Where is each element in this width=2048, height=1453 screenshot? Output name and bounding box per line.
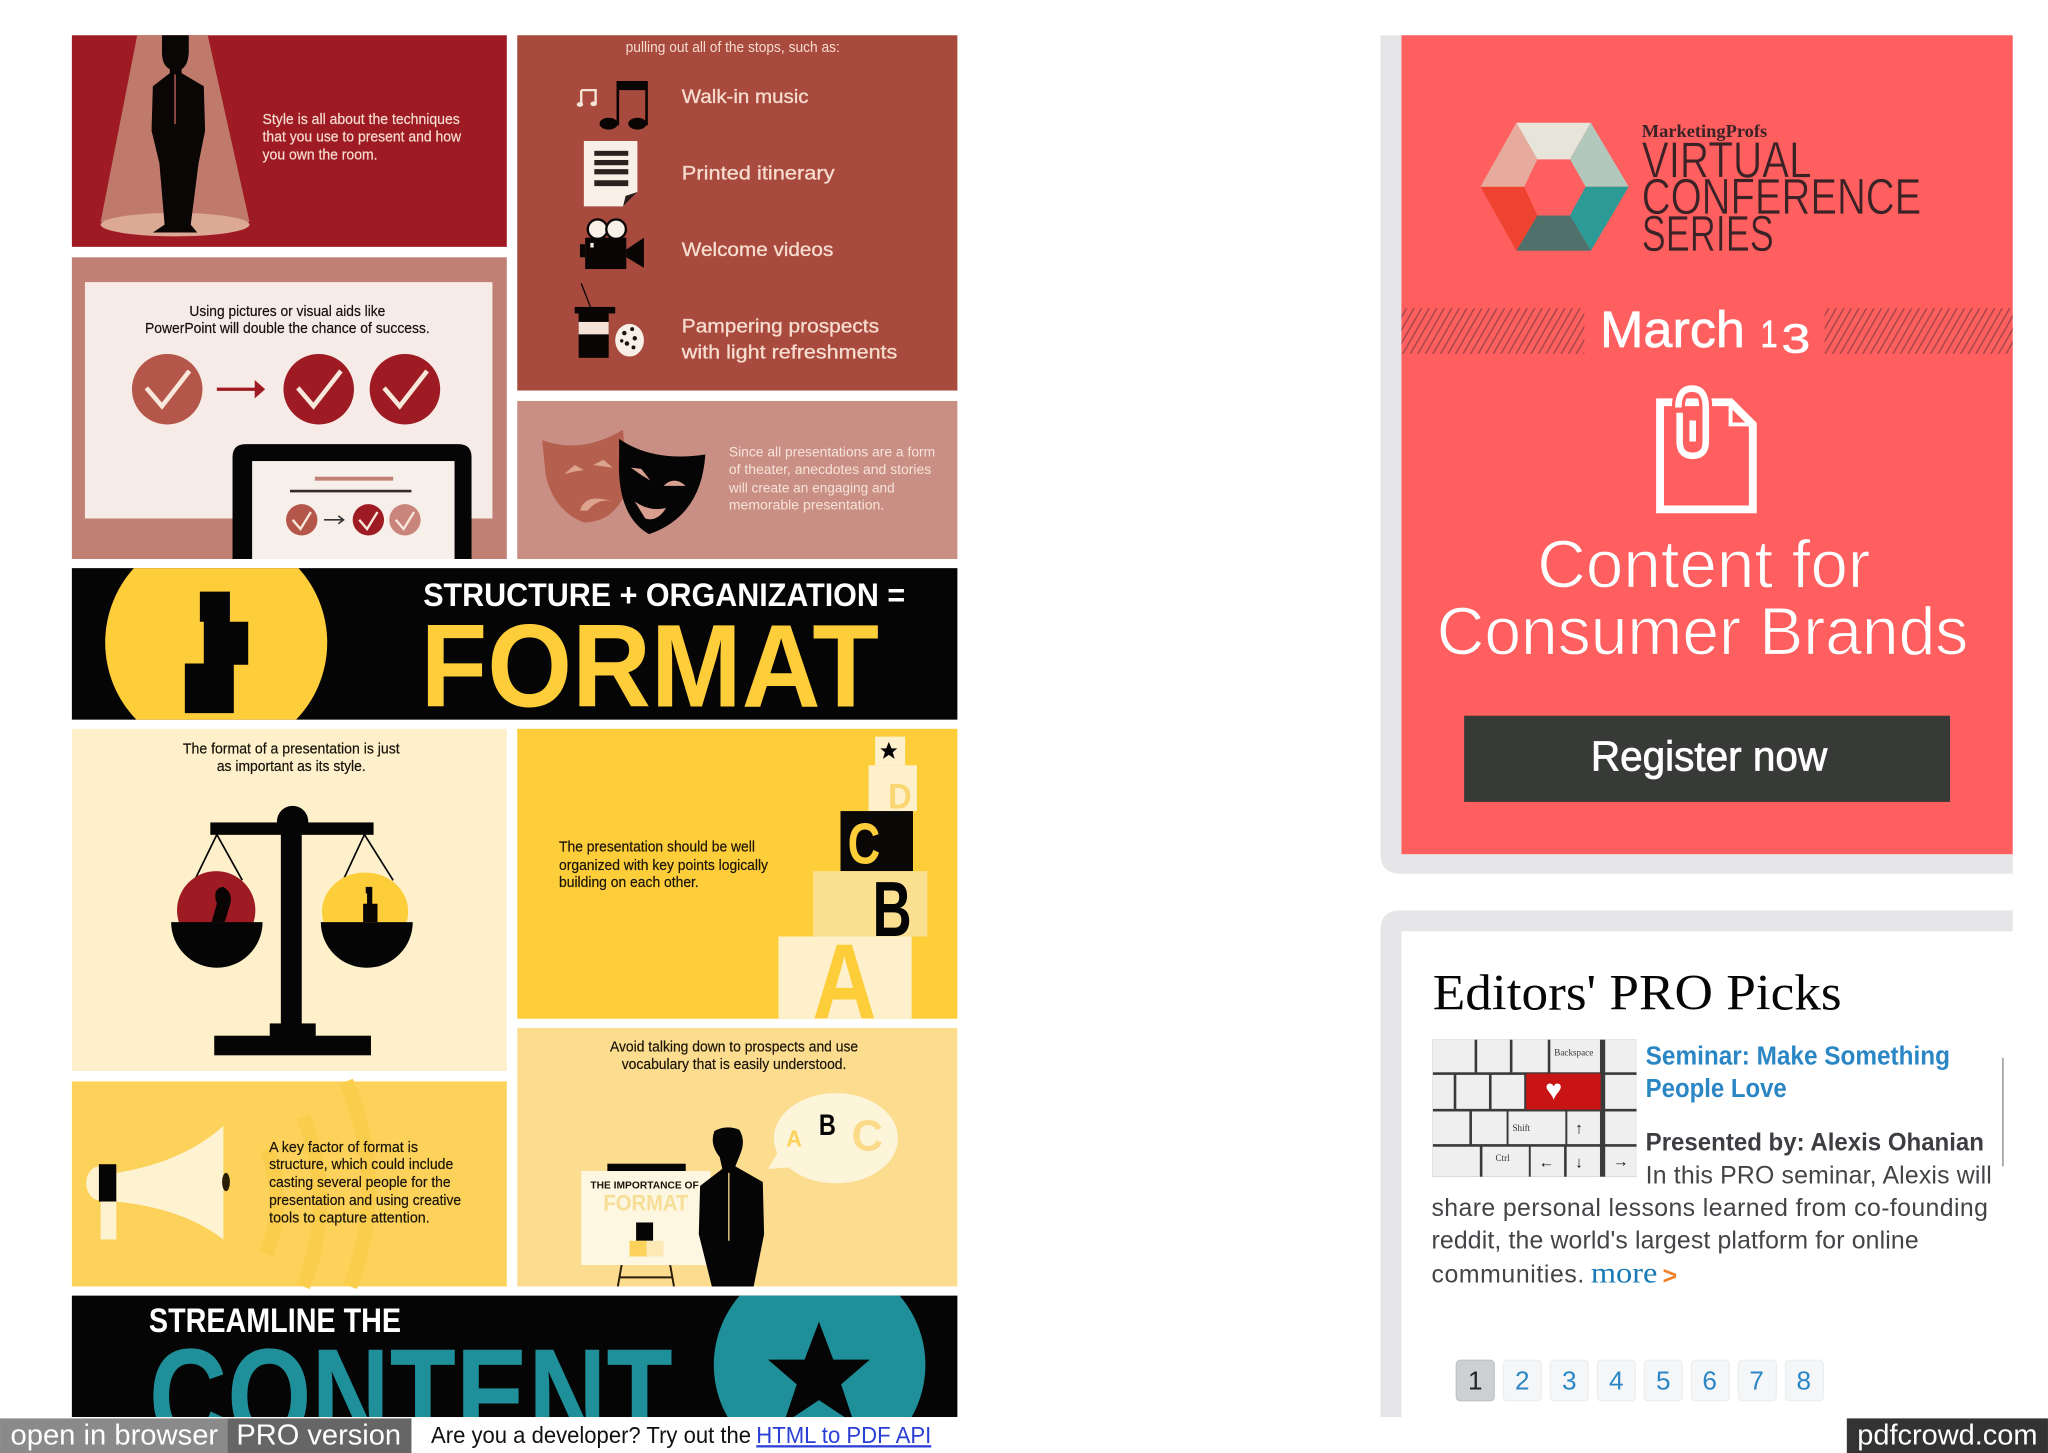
panel: editors pro picks	[1381, 910, 2013, 1417]
text: organization description: organized with key points logically	[559, 857, 768, 874]
text: format importance: The format of a presentation is just	[183, 741, 400, 758]
panel: visual aids	[72, 257, 507, 559]
icon: film camera	[580, 219, 644, 269]
text: seminar title: Seminar: Make Something	[1646, 1042, 1950, 1070]
icon: megaphone	[86, 1126, 230, 1239]
text: walk-in music: Walk-in music	[682, 86, 809, 108]
pagination: 5	[1656, 1366, 1671, 1396]
icon: stacked letter blocks	[778, 737, 927, 1042]
image: keyboard with heart key: Shift	[1512, 1123, 1531, 1133]
icon: theater masks	[542, 430, 705, 534]
image: keyboard with heart key: ↓	[1575, 1155, 1583, 1172]
footer bar: pdfcrowd	[0, 1417, 2048, 1453]
text: style description	[263, 111, 461, 163]
text: key factor of format: structure, which could include	[269, 1156, 453, 1173]
heading: content for consumer brands	[1437, 528, 1968, 669]
image: keyboard with heart key: ↑	[1575, 1121, 1583, 1138]
icon: speech bubble with letters: B	[819, 1109, 836, 1142]
logo wordmark: SERIES	[1642, 205, 1774, 262]
text: intro line: pulling out all of the stops, such as:	[626, 40, 840, 56]
text: theater description: will create an engaging and	[728, 480, 895, 495]
pagination	[1456, 1360, 1823, 1401]
text: visual aids description: PowerPoint will double the chance of success.	[145, 320, 430, 337]
date with hatching: 3	[1782, 316, 1810, 362]
icon: stacked letter blocks: B	[872, 865, 912, 953]
icon: balance scale	[171, 806, 413, 1055]
text: seminar description: Presented by: Alexis Ohanian	[1646, 1130, 1984, 1157]
heading: streamline the: STREAMLINE THE	[149, 1302, 401, 1340]
icon: speech bubble with letters: A	[786, 1126, 802, 1152]
text: key factor of format: A key factor of format is	[269, 1139, 418, 1156]
date with hatching: 1	[1761, 314, 1778, 356]
banner: streamline the content	[72, 1259, 957, 1453]
pagination: 8	[1796, 1366, 1811, 1396]
icon: yellow circle with blocks	[105, 568, 328, 720]
pagination: 7	[1749, 1366, 1764, 1396]
text: seminar description: communities.	[1431, 1262, 1584, 1289]
heading: editors pro picks: Editors' PRO Picks	[1433, 966, 1842, 1022]
banner: format heading	[72, 568, 958, 720]
panel: logical building blocks	[517, 729, 957, 1042]
icon: tablet showing slide	[233, 444, 472, 559]
image: keyboard with heart key: →	[1613, 1153, 1629, 1170]
text: format importance: as important as its style.	[217, 758, 366, 775]
icon: clipped document	[1660, 389, 1753, 509]
icon: stacked letter blocks: A	[812, 922, 876, 1042]
pagination: 6	[1702, 1366, 1717, 1396]
text: style description: you own the room.	[263, 146, 377, 163]
button: register now	[1464, 716, 1950, 802]
icon: drink and cookie	[575, 283, 644, 358]
link: more: >	[1663, 1263, 1677, 1290]
pagination: 2	[1515, 1366, 1530, 1396]
icon: check marks doubling	[132, 354, 440, 424]
icon: speech bubble with letters	[768, 1093, 898, 1183]
text: developer prompt: Are you a developer? Try out the	[431, 1422, 751, 1448]
text: key factor of format: casting several people for the	[269, 1174, 451, 1191]
text: seminar title	[1646, 1042, 1950, 1103]
panel: vocabulary presenter	[517, 1028, 957, 1286]
image: keyboard with heart key: ←	[1539, 1155, 1554, 1172]
pagination: 4	[1609, 1366, 1624, 1396]
heading: structure plus organization: STRUCTURE + ORGANIZATION =	[423, 576, 905, 613]
panel: style spotlight	[72, 35, 507, 247]
text: pampering prospects: Pampering prospects	[682, 315, 879, 337]
text: printed itinerary: Printed itinerary	[682, 163, 835, 185]
image: keyboard with heart key: ♥	[1545, 1075, 1562, 1107]
image: keyboard with heart key: Backspace	[1554, 1047, 1593, 1057]
panel: megaphone structure	[72, 1081, 507, 1286]
text: avoid talking down	[610, 1038, 858, 1073]
text: welcome videos: Welcome videos	[682, 239, 834, 261]
text: seminar description: reddit, the world's largest platform for online	[1431, 1228, 1919, 1255]
image: keyboard with heart key	[1433, 1040, 1637, 1177]
pagination: 3	[1562, 1366, 1577, 1396]
panel: pulling out the stops	[517, 35, 957, 391]
date with hatching: March	[1600, 301, 1745, 358]
icon: presenter silhouette	[699, 1127, 764, 1286]
icon: presentation easel: THE IMPORTANCE OF	[590, 1181, 699, 1192]
text: pampering prospects	[681, 315, 898, 364]
button: register now: Register now	[1591, 733, 1828, 780]
ad panel: virtual conference	[1381, 35, 2013, 874]
text: theater description: memorable presentation.	[729, 497, 884, 512]
icon: teal circle with star	[714, 1296, 926, 1418]
logo wordmark: CONFERENCE	[1642, 168, 1921, 225]
heading: content for consumer brands: Consumer Brands	[1437, 594, 1968, 669]
logo wordmark	[1642, 121, 1921, 262]
text: seminar title: People Love	[1646, 1075, 1787, 1103]
text: theater description	[728, 444, 935, 512]
text: key factor of format: tools to capture attention.	[269, 1209, 430, 1226]
text: style description: Style is all about the techniques	[263, 111, 460, 128]
icon: stacked letter blocks: C	[848, 812, 880, 876]
text: seminar description: share personal lessons learned from co-founding	[1431, 1195, 1988, 1222]
text: style description: that you use to present and how	[263, 129, 461, 146]
text: theater description: Since all presentations are a form	[729, 444, 935, 459]
text: organization description: The presentation should be well	[559, 839, 755, 856]
link: html to pdf api: HTML to PDF API	[756, 1422, 931, 1448]
text: visual aids description: Using pictures or visual aids like	[189, 303, 385, 320]
icon: spotlight and presenter silhouette	[101, 35, 250, 236]
link: more: more	[1591, 1257, 1657, 1290]
text: avoid talking down: vocabulary that is easily understood.	[622, 1056, 846, 1073]
decorative ripples	[266, 1081, 369, 1286]
badge: pdfcrowd.com: pdfcrowd.com	[1857, 1420, 2038, 1452]
icon: hexagon logo	[1480, 123, 1629, 251]
text: organization description	[559, 839, 768, 891]
text: seminar description	[1431, 1130, 1992, 1289]
image: keyboard with heart key: Ctrl	[1495, 1153, 1510, 1163]
panel: format versus style scale	[72, 729, 507, 1071]
text: key factor of format	[269, 1139, 461, 1226]
logo wordmark: MarketingProfs	[1642, 121, 1767, 141]
date with hatching	[1401, 301, 2013, 362]
text: key factor of format: presentation and using creative	[269, 1192, 461, 1209]
icon: printed page	[584, 141, 637, 206]
panel: theater	[517, 401, 957, 559]
icon: music notes	[577, 81, 648, 130]
icon: speech bubble with letters: C	[852, 1113, 883, 1161]
text: avoid talking down: Avoid talking down to prospects and use	[610, 1038, 858, 1055]
text: pampering prospects: with light refreshments	[681, 342, 898, 364]
icon: stacked letter blocks: D	[888, 777, 912, 816]
heading: content for consumer brands: Content for	[1537, 528, 1870, 603]
text: theater description: of theater, anecdotes and stories	[729, 462, 931, 477]
icon: presentation easel	[581, 1164, 711, 1286]
heading: format: FORMAT	[421, 601, 879, 732]
pagination: 1	[1468, 1366, 1483, 1396]
text: visual aids description	[145, 303, 430, 337]
button: pro version: PRO version	[236, 1420, 401, 1452]
text: organization description: building on each other.	[559, 874, 699, 891]
logo wordmark: VIRTUAL	[1642, 132, 1812, 189]
icon: presentation easel: FORMAT	[603, 1191, 689, 1216]
text: format importance	[183, 741, 400, 775]
text: seminar description: In this PRO seminar, Alexis will	[1646, 1162, 1992, 1189]
button: open in browser: open in browser	[10, 1420, 219, 1452]
